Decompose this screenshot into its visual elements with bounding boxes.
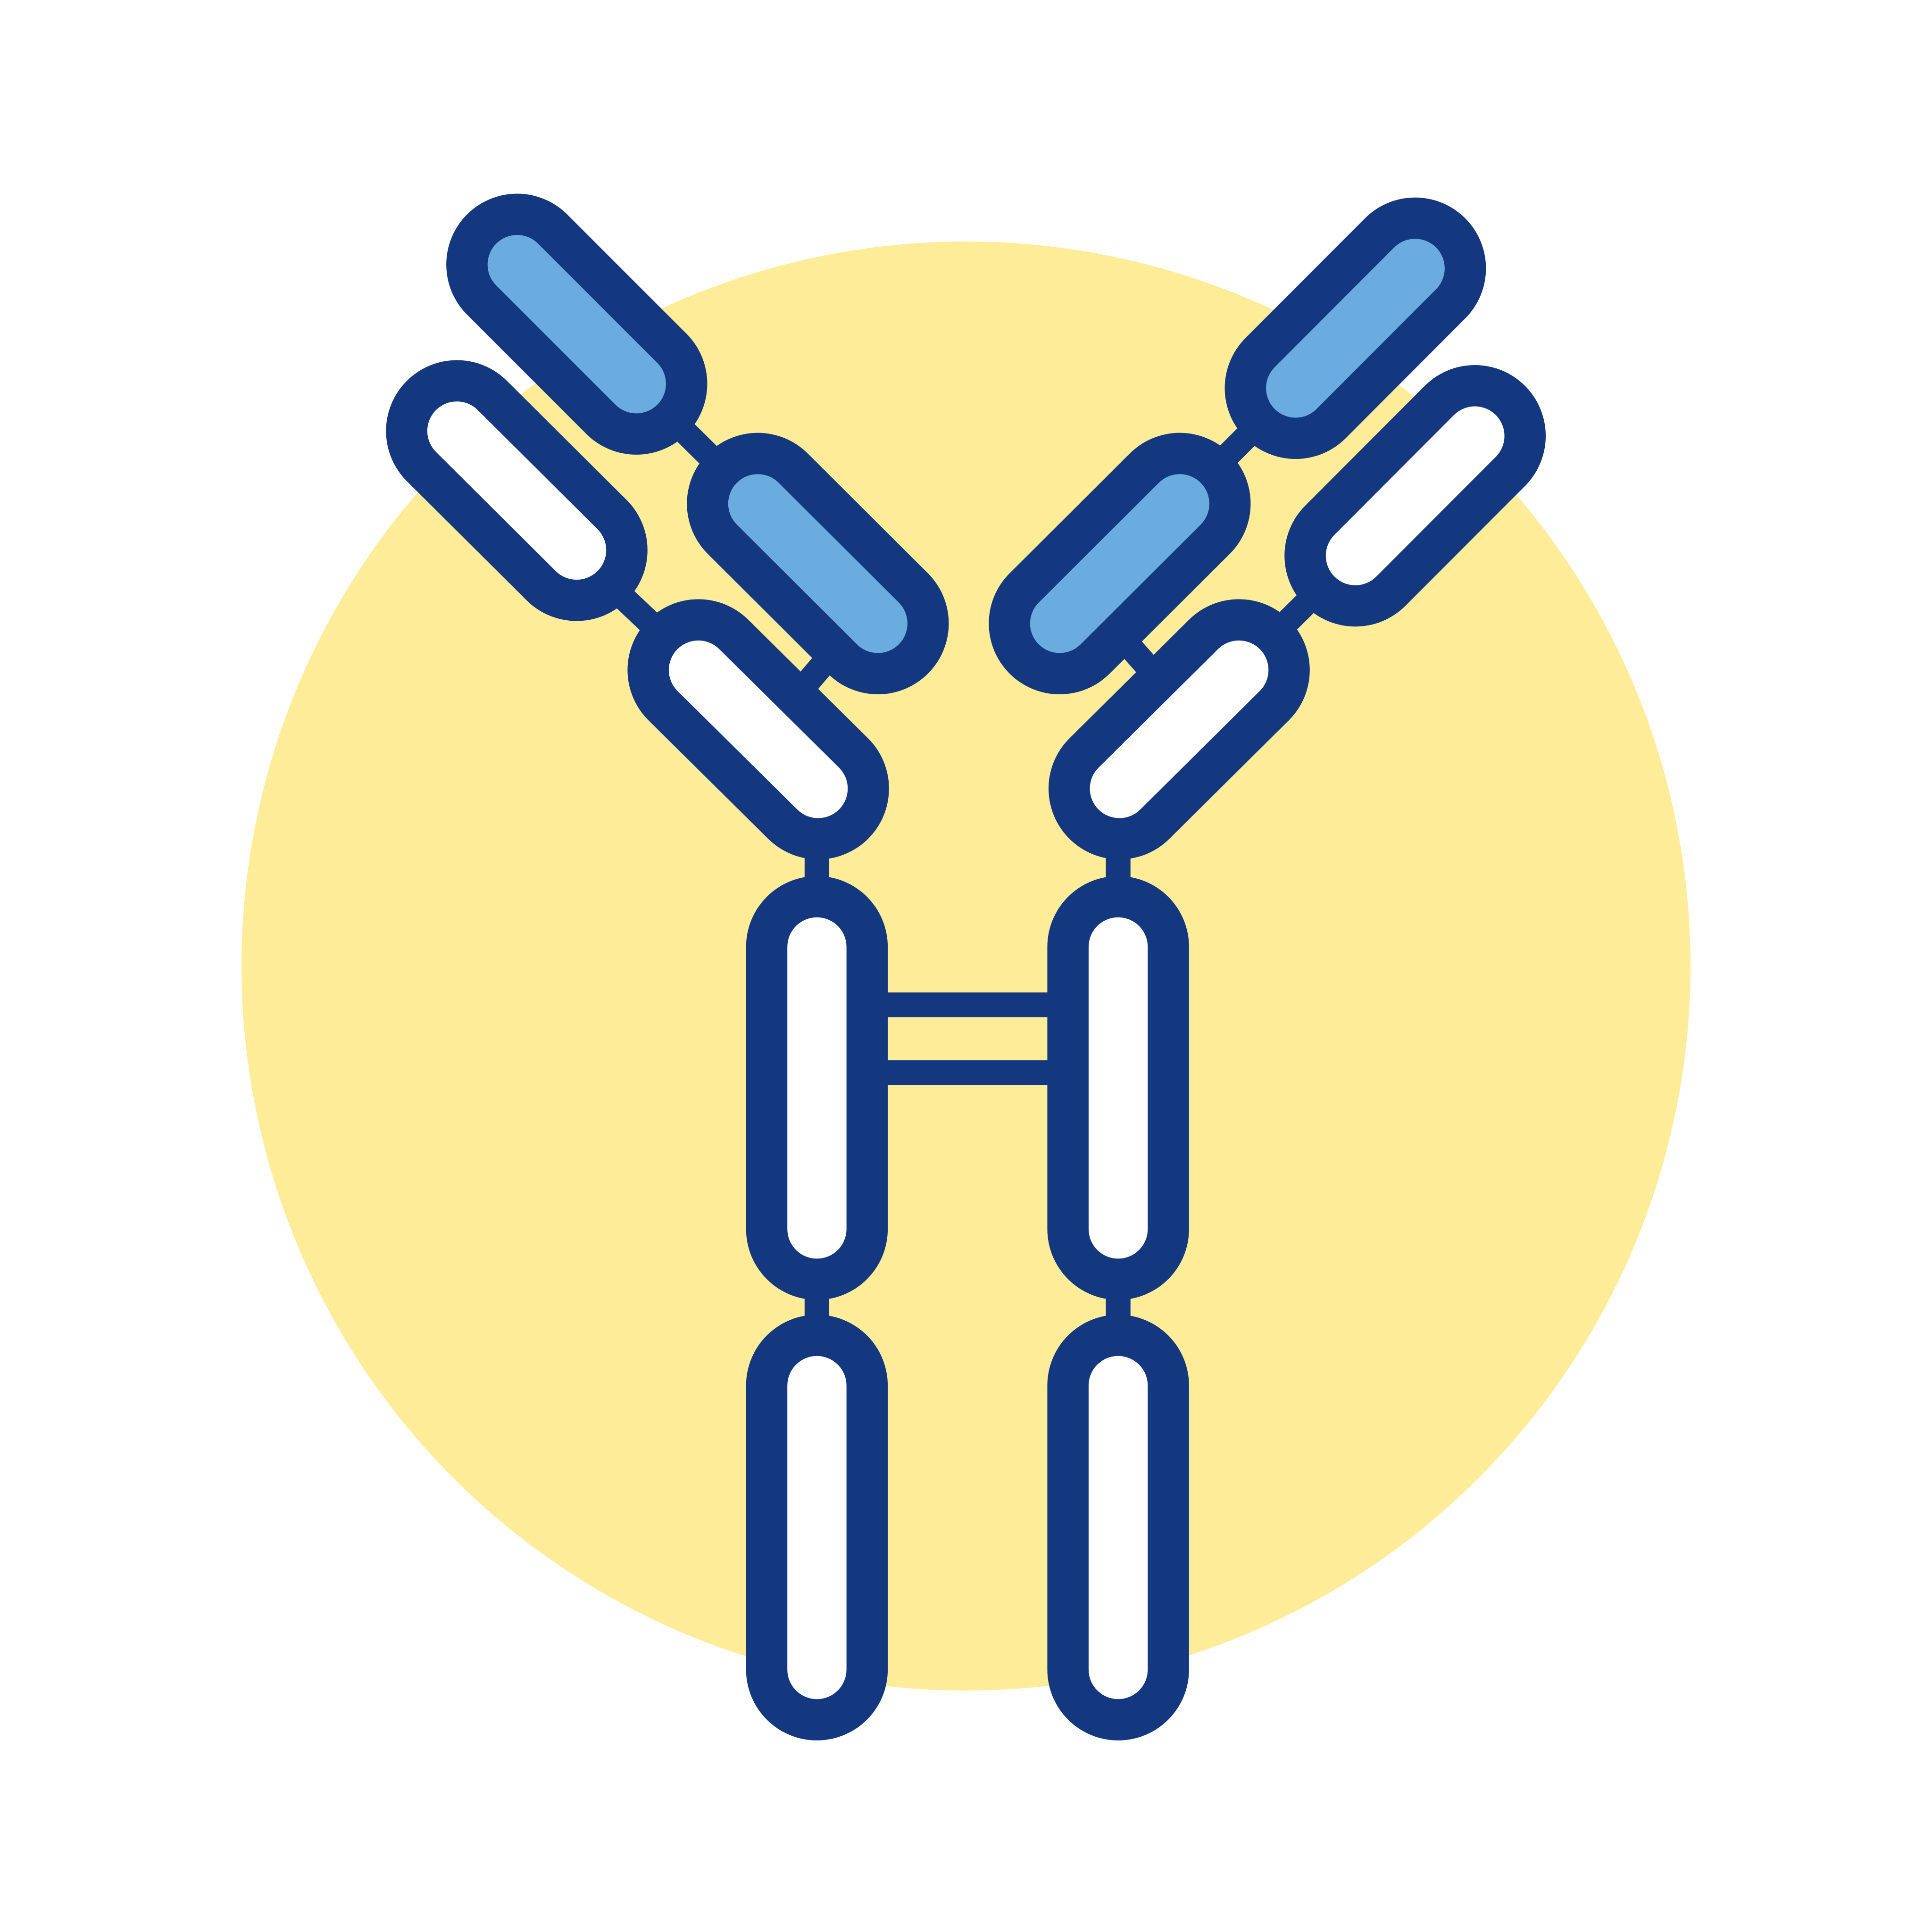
left arm: inner constant domain, white	[699, 670, 818, 789]
right arm: inner constant domain, white	[1119, 670, 1239, 789]
left heavy chain: lower domain	[790, 1385, 844, 1670]
right arm: outer constant domain, white	[1355, 436, 1475, 556]
background circle	[242, 242, 1690, 1690]
left arm: outer variable domain, blue	[517, 265, 636, 384]
left arm: inner variable domain, blue	[758, 504, 878, 624]
connectors between domains	[577, 384, 1354, 1392]
right heavy chain: upper domain	[1091, 947, 1145, 1229]
left arm: outer constant domain, white	[457, 431, 577, 550]
right arm: inner variable domain, blue	[1060, 504, 1180, 624]
right heavy chain: lower domain	[1091, 1385, 1145, 1670]
right arm: outer variable domain, blue	[1296, 268, 1415, 388]
left heavy chain: upper domain	[790, 947, 844, 1229]
